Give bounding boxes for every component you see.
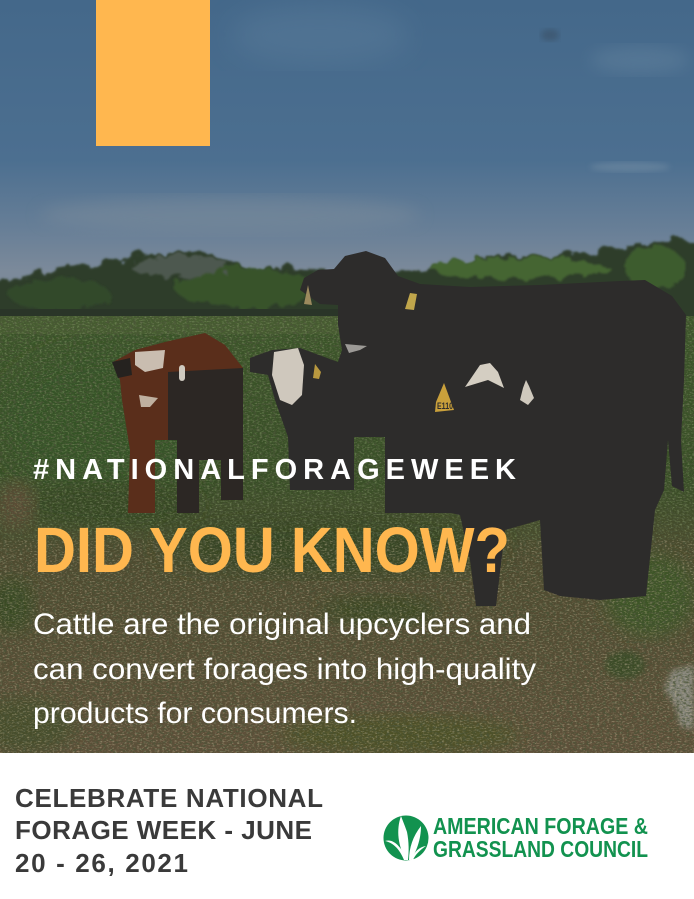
body text [33, 608, 536, 730]
tree line [0, 240, 694, 330]
footer date text: CELEBRATE NATIONAL [15, 783, 323, 813]
yellow ear tag E110: E110 [437, 401, 453, 411]
yellow ear tag cow [405, 293, 417, 310]
ear tag left [304, 285, 312, 305]
heading: did you know: DID YOU KNOW? [34, 514, 510, 586]
left brown calf [112, 333, 243, 513]
hashtag heading: #NATIONALFORAGEWEEK [33, 454, 516, 486]
sky [0, 0, 694, 320]
white patch on calf head [465, 363, 504, 388]
logo: American Forage & Grassland Council [384, 813, 648, 862]
muzzle highlight [345, 344, 367, 353]
logo wordmark [433, 813, 648, 862]
footer date text [15, 783, 323, 878]
yellow ear tag calf [313, 364, 321, 379]
footer date text: 20 - 26, 2021 [15, 848, 188, 878]
body text: products for consumers. [33, 697, 357, 730]
footer date text: FORAGE WEEK - JUNE [15, 815, 312, 845]
white ear tag [520, 380, 534, 405]
pasture and dry ground [0, 316, 694, 755]
big black cow with calf [250, 251, 686, 606]
orange accent rectangle [96, 0, 210, 146]
logo wordmark: GRASSLAND COUNCIL [433, 836, 648, 862]
middle calf white face [272, 348, 304, 405]
body text: can convert forages into high-quality [33, 653, 536, 686]
white footer band [0, 753, 694, 899]
logo icon: leaf circle [384, 816, 428, 860]
body text: Cattle are the original upcyclers and [33, 608, 531, 641]
logo wordmark: AMERICAN FORAGE & [433, 813, 648, 839]
yellow ear tag E110 [435, 383, 454, 412]
